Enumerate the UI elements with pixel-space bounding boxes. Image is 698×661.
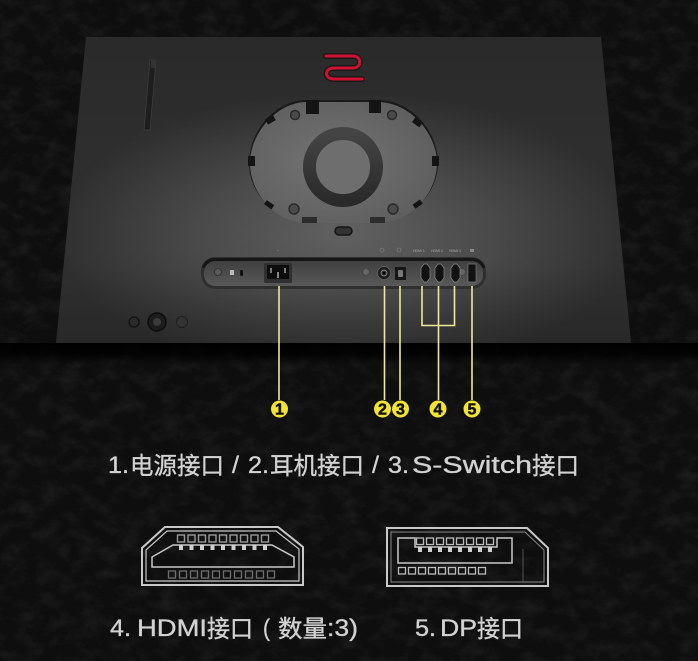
caption: ports 1 to 3: 耳机接口 (270, 453, 364, 480)
VESA mount recess (248, 100, 439, 223)
caption: HDMI: ( (263, 615, 270, 642)
port: headphone jack (378, 266, 390, 280)
caption: ports 1 to 3: S-Switch (412, 452, 532, 479)
caption: HDMI: :3) (327, 615, 358, 642)
caption: DP: 接口 (477, 616, 523, 643)
caption: HDMI: 数量 (278, 616, 327, 643)
small port labels (277, 248, 474, 253)
icon: DisplayPort connector (387, 528, 548, 586)
icon: red ZOWIE logo (326, 56, 362, 79)
port: power socket (264, 263, 292, 283)
small port labels: ~ (277, 249, 279, 253)
caption: HDMI: 4. (110, 615, 131, 642)
caption: DP (415, 615, 523, 643)
caption: ports 1 to 3: 2. (248, 452, 269, 479)
caption: ports 1 to 3: 接口 (532, 453, 579, 480)
small port labels: HDMI 2 (431, 249, 443, 253)
badge 3: 3 (396, 402, 405, 418)
small port labels: HDMI 3 (449, 249, 461, 253)
center ring (310, 134, 376, 200)
caption: ports 1 to 3: 电源接口 (130, 453, 224, 480)
port strip (201, 248, 486, 289)
caption: ports 1 to 3: 1. (108, 452, 129, 479)
caption: HDMI: HDMI (137, 615, 207, 642)
caption: DP: DP (440, 615, 477, 642)
caption: ports 1 to 3: / (232, 452, 239, 479)
release button (335, 227, 352, 235)
badge 4 (430, 400, 446, 418)
monitor shadow (0, 343, 698, 365)
badge 2: 2 (378, 402, 387, 418)
icon: HDMI connector (142, 527, 303, 585)
caption: ports 1 to 3: 3. (388, 452, 409, 479)
badge 1: 1 (275, 402, 284, 418)
caption: ports 1 to 3: / (372, 452, 379, 479)
caption: ports 1 to 3 (108, 452, 579, 480)
badge 5 (464, 400, 480, 418)
badge 4: 4 (434, 402, 443, 418)
badge 5: 5 (468, 402, 477, 418)
monitor back panel (56, 37, 631, 343)
port: S-Switch (395, 267, 406, 280)
lock and screw details (214, 268, 466, 276)
bottom controls (129, 313, 188, 331)
number badges (271, 400, 480, 418)
VESA notches (248, 100, 439, 223)
yellow leader lines (279, 286, 472, 400)
caption: HDMI (110, 615, 358, 643)
VESA screws (289, 110, 398, 214)
caption: HDMI: 接口 (207, 616, 253, 643)
icon: cable slot (144, 60, 156, 130)
port: HDMI sockets (421, 264, 460, 282)
badge 2 (374, 400, 391, 418)
badge 3 (392, 400, 409, 418)
port: DisplayPort socket (468, 264, 476, 282)
small port labels: HDMI 1 (413, 249, 425, 253)
badge 1 (271, 400, 288, 418)
caption: DP: 5. (415, 615, 436, 642)
